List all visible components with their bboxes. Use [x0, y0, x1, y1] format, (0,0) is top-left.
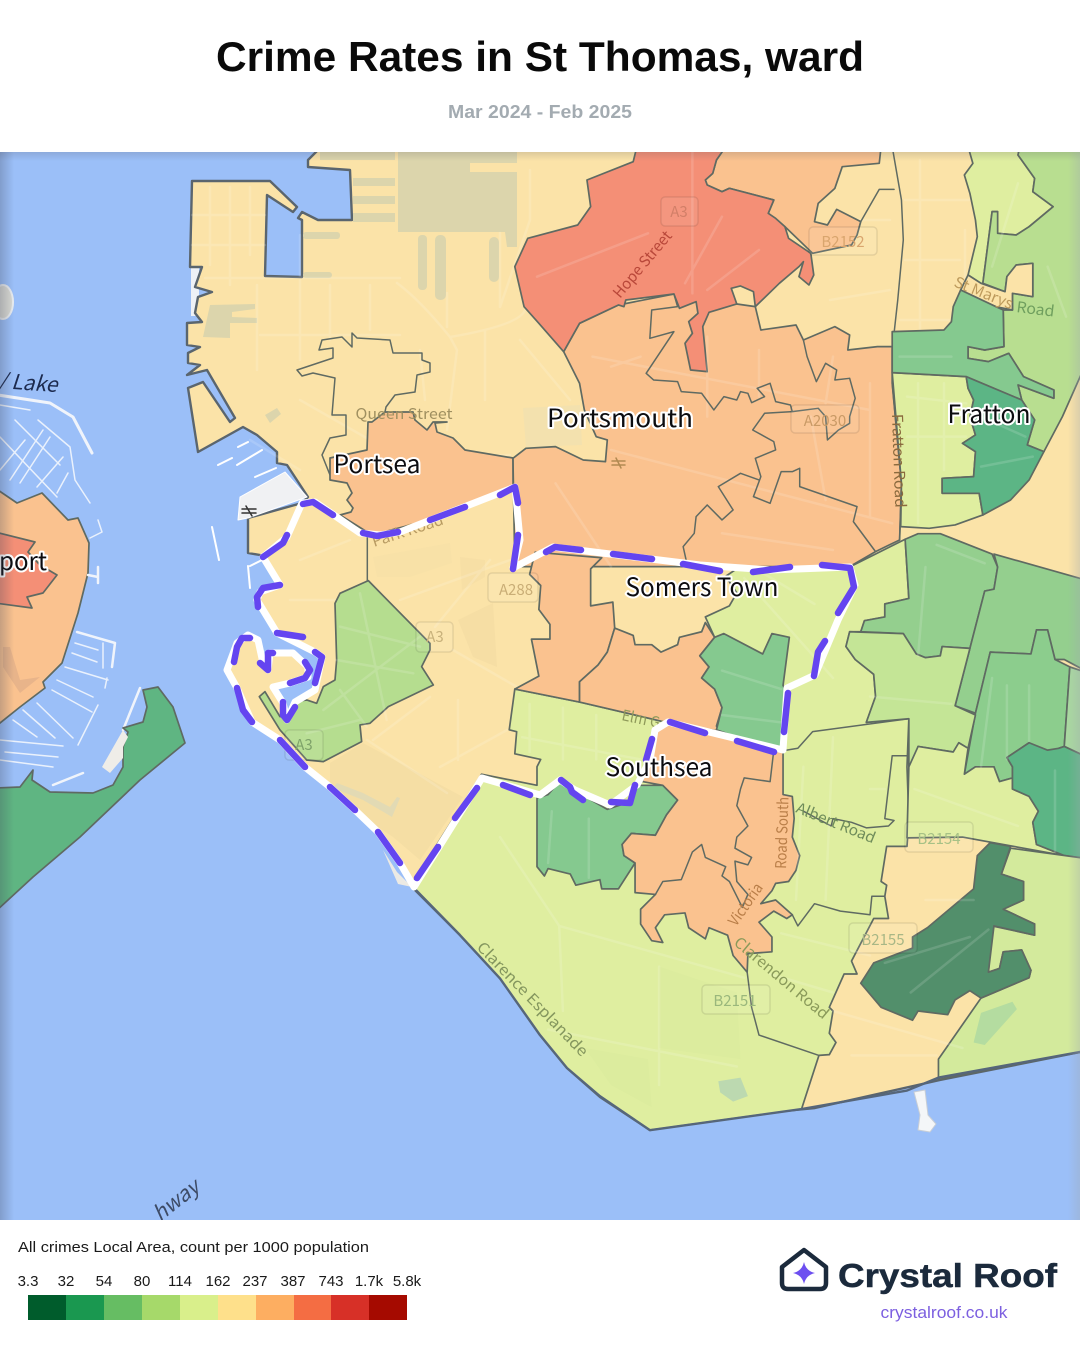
place label: Fratton: Fratton [948, 395, 1030, 431]
road labels [0, 201, 1056, 1228]
orange ward west of Somers Town [515, 552, 615, 702]
south-east wards (zoom 4 coordinate block) [411, 534, 1080, 1130]
legend scale labels: 1.7k [355, 1273, 384, 1290]
Old Portsmouth green ward [259, 537, 433, 762]
green ward Southsea [537, 782, 678, 889]
central Portsmouth wards (zoom 3 coordinate block) [513, 147, 1080, 567]
Portsea orange ward [330, 412, 516, 535]
logo url: crystalroof.co.uk [880, 1304, 1008, 1322]
Coast dark outline [411, 885, 1080, 1130]
road labels: Road South [770, 796, 794, 869]
Fratton light green wards [892, 373, 983, 528]
St Marys yellow notch [961, 263, 1033, 310]
subtitle: date range: Mar 2024 - Feb 2025 [448, 102, 632, 122]
harbour pier lines [212, 442, 276, 588]
grey L shape on beach [333, 783, 400, 817]
Green ward C [964, 630, 1070, 782]
pond [974, 1002, 1017, 1045]
Portsmouth park speckled patch [523, 405, 582, 448]
road labels: A288 [499, 579, 533, 600]
water [0, 152, 1080, 1220]
ward boundary line south of Park Road [366, 537, 368, 581]
Light mid green ward [846, 632, 975, 767]
orange ward Elm Grove north [580, 622, 722, 732]
road shields [285, 197, 973, 1014]
legend scale labels: 743 [318, 1273, 344, 1290]
legend scale labels: 162 [205, 1273, 231, 1290]
place label: Portsea: Portsea [334, 445, 420, 481]
legend scale labels: 237 [242, 1273, 268, 1290]
large orange ward block [513, 294, 901, 567]
road labels: A3 [426, 626, 444, 647]
place label: Gosport fragment: port [0, 542, 48, 578]
road labels: Victoria [723, 879, 768, 930]
road labels: Road [1015, 296, 1056, 322]
dockyard tan patches [203, 152, 517, 817]
road labels: A3 [670, 201, 688, 222]
streets on red and orange wards [537, 150, 892, 567]
legend scale labels: 5.8k [393, 1273, 422, 1290]
Common pavilion patch [718, 1078, 748, 1102]
beach white patch [383, 850, 410, 886]
road labels: A2030 [804, 410, 846, 431]
road labels: Clarence Esplanade [472, 937, 593, 1061]
road labels: B2154 [917, 828, 961, 849]
Green ward B [955, 554, 1080, 713]
Gosport green ward [0, 687, 185, 912]
north Fratton light green ward [964, 147, 1053, 283]
legend scale labels: 387 [280, 1273, 306, 1290]
road labels: B2151 [713, 990, 757, 1011]
title: Crime Rates in St Thomas, ward [216, 33, 864, 80]
legend scale labels: 114 [168, 1273, 192, 1290]
road labels: St Marys [951, 271, 1016, 314]
legend scale labels: 32 [58, 1273, 74, 1290]
streets on Old Portsmouth ward [307, 593, 420, 733]
legend [18, 1239, 422, 1320]
Green strip right edge [1064, 667, 1080, 759]
road labels: B2155 [861, 929, 905, 950]
road labels: Park Road [369, 509, 446, 552]
Common and Albert Road light green [411, 539, 909, 1130]
road labels: B2152 [821, 231, 865, 252]
orange internal ward lines [513, 189, 894, 563]
inner tan blocks [373, 543, 452, 577]
road labels: Albert Road [793, 797, 879, 848]
Crystal Roof logo [782, 1250, 1058, 1322]
yellow area street lines [192, 160, 970, 793]
legend scale labels: 54 [96, 1273, 112, 1290]
legend title: All crimes Local Area, count per 1000 population [18, 1239, 369, 1256]
legend scale labels [18, 1273, 422, 1290]
grey land blob [0, 285, 13, 319]
pier [914, 1090, 936, 1132]
Gosport park patch [3, 647, 40, 693]
Street lines in south-east [500, 545, 1055, 1085]
beach area tan [330, 743, 463, 860]
orange ward Southsea [622, 722, 800, 972]
road labels: Elm Gr [620, 704, 668, 734]
common park tint [585, 967, 740, 1107]
Gosport land and wards [0, 285, 185, 912]
logo wordmark: Crystal Roof [838, 1257, 1058, 1294]
ward boundary: white route under dashes [227, 487, 855, 887]
Green ward D [1007, 743, 1080, 859]
map edge vignette [0, 152, 1080, 1220]
road labels: Clarendon Road [730, 932, 834, 1024]
road labels: Queen Street [356, 403, 453, 424]
legend colour swatches [28, 1295, 407, 1320]
Portsea ward outlines [297, 333, 430, 475]
road labels: A3 [295, 734, 313, 755]
white jetty strip west dock [191, 268, 199, 316]
station symbols [242, 458, 625, 516]
north-east mid green ward [968, 147, 1080, 452]
Gosport concrete quay [102, 730, 128, 773]
road labels: Fratton Road [887, 413, 911, 508]
Fratton green ward [892, 290, 1054, 400]
road labels: hway [146, 1170, 208, 1228]
legend scale labels: 3.3 [18, 1273, 38, 1290]
ward boundary: purple dashes [234, 487, 854, 878]
Gosport north marina white lines [0, 395, 92, 453]
legend scale labels: 80 [134, 1273, 150, 1290]
red ward: Hope Street [515, 147, 814, 372]
Light green ward east [907, 743, 1064, 856]
main land mass [187, 150, 1080, 1130]
road labels: Hope Street [608, 226, 677, 302]
place label: Somers Town: Somers Town [626, 568, 778, 604]
Gosport orange ward [0, 488, 89, 727]
ferry port [238, 472, 307, 520]
red ward in Gosport [0, 532, 57, 608]
Dark green ward [861, 843, 1035, 1020]
South-east light green ward [938, 848, 1080, 1079]
Southsea internal ward lines [655, 719, 909, 1055]
Fratton Road boundary [892, 147, 903, 540]
icon: house with star [782, 1250, 826, 1289]
Green ward A [861, 534, 998, 658]
Gosport south marina white lines [0, 643, 108, 767]
green ward Somers Town east [700, 634, 789, 750]
streets on Fratton wards [900, 183, 1066, 523]
orange north-east ward [705, 147, 881, 253]
Fratton dark green ward [942, 377, 1044, 515]
place label: Southsea: Southsea [606, 748, 712, 784]
place label: Portsmouth: Portsmouth [547, 399, 693, 435]
